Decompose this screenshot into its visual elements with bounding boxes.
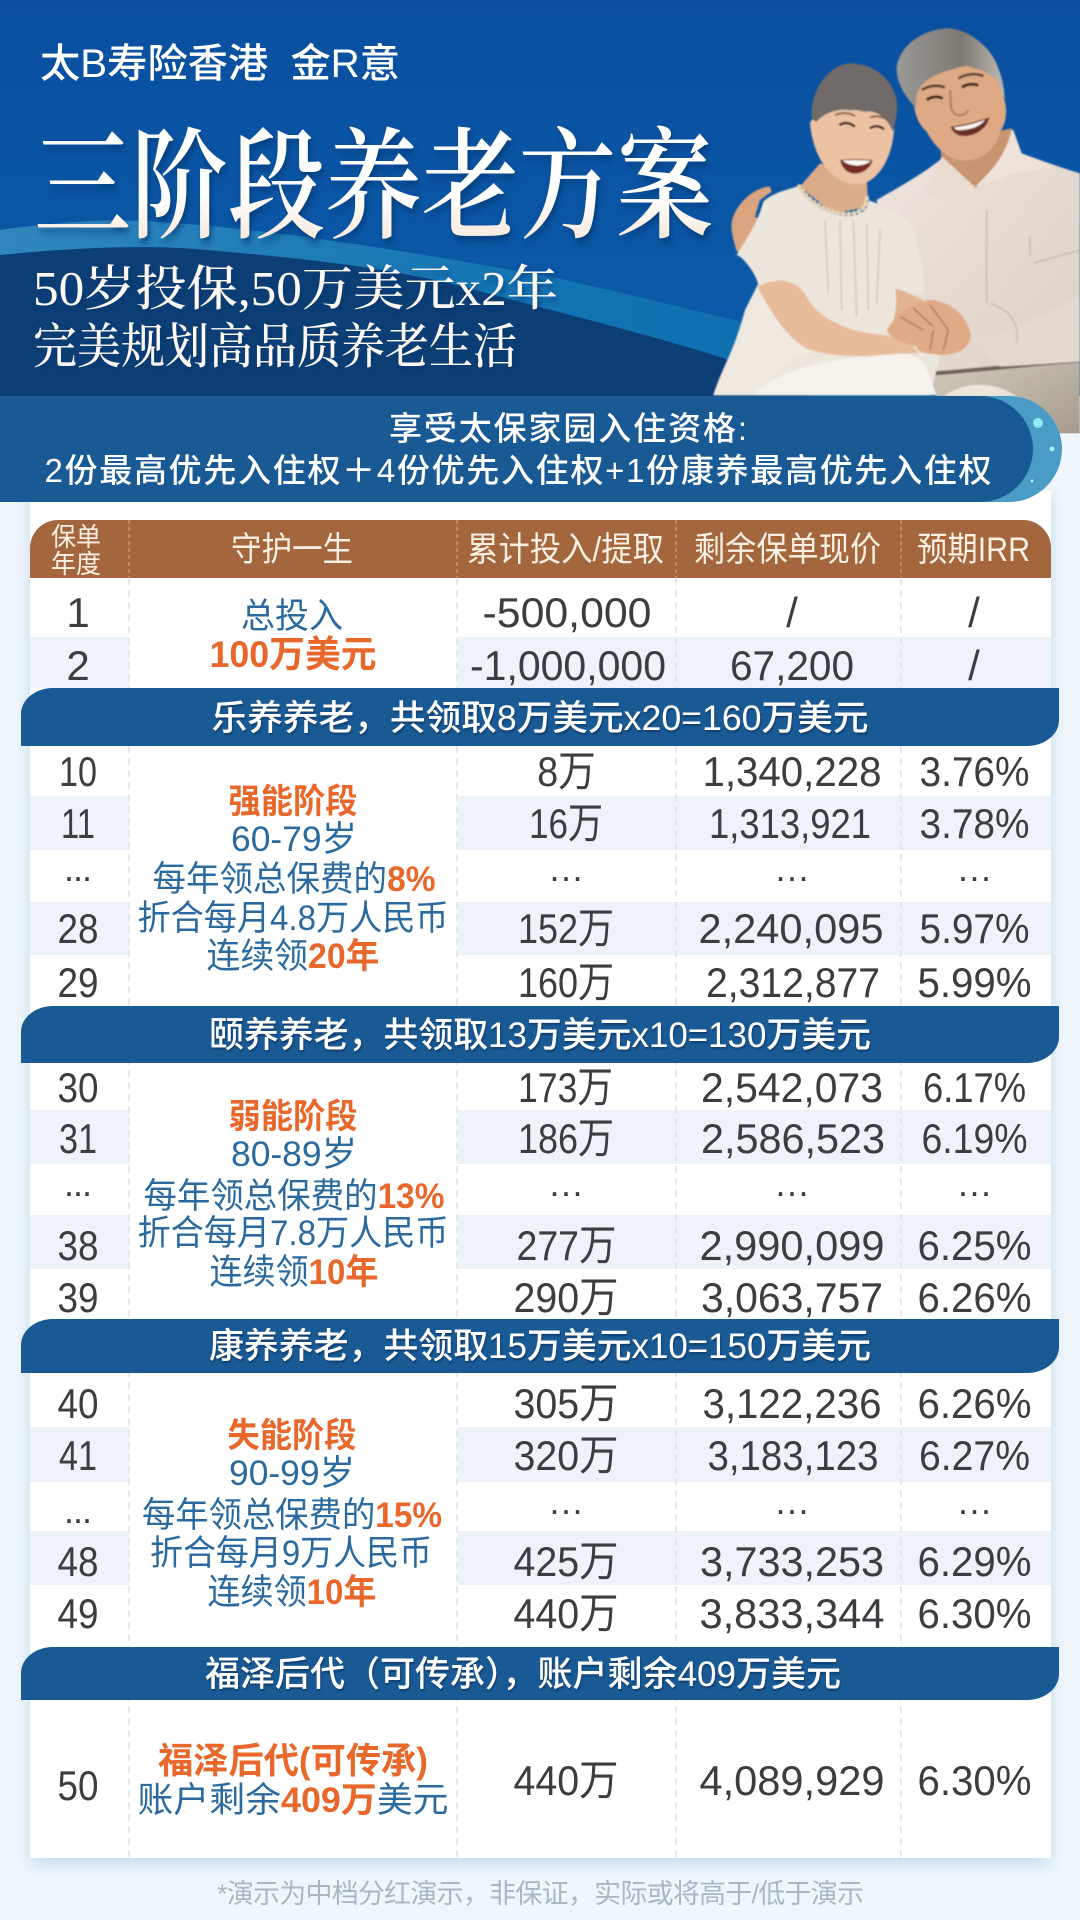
table stripes bbox=[30, 637, 1051, 1585]
strong ability description: 连续领20年 bbox=[206, 937, 380, 976]
section: strong ability rows: 3.78% bbox=[920, 800, 1030, 847]
section: weak ability rows: 38 bbox=[58, 1222, 98, 1269]
section: total investment rows: 2 bbox=[66, 642, 90, 689]
weak ability description: 每年领总保费的13% bbox=[144, 1177, 444, 1216]
band: yi yang bbox=[21, 1006, 1059, 1063]
section: strong ability rows: 11 bbox=[61, 800, 95, 847]
strong ability description: 每年领总保费的8% bbox=[152, 860, 435, 899]
section: weak ability rows: 277万 bbox=[516, 1222, 616, 1269]
man trousers bbox=[932, 362, 1080, 434]
section: weak ability rows: 3,063,757 bbox=[701, 1274, 883, 1321]
weak ability description: 弱能阶段 bbox=[228, 1098, 358, 1136]
white table card bbox=[30, 490, 1051, 1858]
total investment cell bbox=[210, 597, 376, 675]
section: total investment rows: -1,000,000 bbox=[470, 642, 666, 689]
woman arm bbox=[757, 281, 918, 356]
section: disability rows: 6.27% bbox=[919, 1432, 1030, 1479]
section: year 50 row: 440万 bbox=[514, 1757, 618, 1804]
woman eyes and brows bbox=[839, 123, 884, 129]
section: weak ability rows: 2,990,099 bbox=[700, 1222, 884, 1269]
brand line: 太B寿险香港 金R意 bbox=[40, 42, 400, 86]
section: disability rows: 40 bbox=[58, 1380, 98, 1427]
section: strong ability rows: ... bbox=[958, 848, 991, 889]
section: total investment rows: 67,200 bbox=[730, 642, 854, 689]
section: disability rows: 48 bbox=[58, 1538, 98, 1585]
section: disability rows: 3,733,253 bbox=[700, 1538, 884, 1585]
woman lower blouse bbox=[712, 348, 734, 396]
clasped hands bbox=[887, 300, 971, 355]
section: strong ability rows: 152万 bbox=[518, 905, 614, 952]
section: strong ability rows: ... bbox=[550, 848, 582, 889]
section: strong ability rows: 1,313,921 bbox=[709, 800, 871, 847]
section: weak ability rows: ... bbox=[776, 1163, 808, 1204]
man hand on shoulder bbox=[731, 187, 772, 252]
section: disability rows: 425万 bbox=[514, 1538, 618, 1585]
section: weak ability rows: 6.26% bbox=[918, 1274, 1032, 1321]
woman hair bbox=[812, 63, 897, 132]
section: disability rows: 305万 bbox=[514, 1380, 618, 1427]
section: weak ability rows: 290万 bbox=[514, 1274, 618, 1321]
disability description: 失能阶段 bbox=[228, 1417, 356, 1455]
section: weak ability rows: 6.25% bbox=[918, 1222, 1032, 1269]
disability description: 每年领总保费的15% bbox=[142, 1496, 442, 1535]
subtitle line 1: 50岁投保,50万美元x2年 bbox=[33, 262, 558, 317]
disability description: 连续领10年 bbox=[208, 1573, 376, 1612]
section: disability rows: 41 bbox=[59, 1432, 97, 1479]
section: year 50 row: 50 bbox=[58, 1762, 98, 1809]
section: weak ability rows: 186万 bbox=[518, 1115, 614, 1162]
section: weak ability rows: 2,542,073 bbox=[701, 1064, 883, 1111]
section: strong ability rows: 16万 bbox=[529, 800, 603, 847]
section: total investment rows bbox=[66, 589, 980, 689]
band: le yang: 乐养养老，共领取8万美元x20=160万美元 bbox=[212, 699, 868, 738]
ribbon dots bbox=[1030, 418, 1054, 482]
section: disability rows: 6.26% bbox=[918, 1380, 1032, 1427]
section: strong ability rows: 1,340,228 bbox=[702, 748, 882, 795]
section: strong ability rows: 160万 bbox=[518, 959, 614, 1006]
strong ability description: 60-79岁 bbox=[231, 820, 357, 859]
woman blouse bbox=[736, 186, 924, 294]
section: disability rows: 3,122,236 bbox=[702, 1380, 882, 1427]
section: total investment rows: 1 bbox=[66, 589, 90, 636]
disability description: 折合每月9万人民币 bbox=[150, 1534, 432, 1573]
section: weak ability rows: ... bbox=[958, 1163, 991, 1204]
section: strong ability rows: ... bbox=[64, 848, 92, 889]
woman face bbox=[810, 110, 894, 184]
man hair bbox=[897, 28, 1005, 108]
weak ability description: 80-89岁 bbox=[231, 1135, 357, 1174]
section: weak ability rows: 39 bbox=[58, 1274, 98, 1321]
man neck bbox=[940, 128, 1017, 188]
section: disability rows: ... bbox=[776, 1481, 808, 1522]
section: strong ability rows: 2,312,877 bbox=[706, 959, 880, 1006]
section: disability rows: 3,183,123 bbox=[708, 1432, 878, 1479]
section: year 50 row: 4,089,929 bbox=[700, 1757, 884, 1804]
section: total investment rows: / bbox=[968, 589, 980, 636]
section: disability rows bbox=[58, 1380, 1032, 1637]
ribbon: residence qualification bbox=[0, 396, 1062, 502]
section: weak ability rows: ... bbox=[550, 1163, 582, 1204]
photo: smiling senior couple bbox=[713, 28, 1080, 440]
man shirt bbox=[877, 130, 1080, 375]
section: strong ability rows: 29 bbox=[58, 959, 98, 1006]
band: kang yang: 康养养老，共领取15万美元x10=150万美元 bbox=[209, 1327, 871, 1366]
section: weak ability rows: 173万 bbox=[518, 1064, 613, 1111]
section: strong ability rows bbox=[58, 748, 1032, 1006]
header: policy year: 保单 bbox=[51, 522, 101, 552]
ribbon line 2: 2份最高优先入住权＋4份优先入住权+1份康养最高优先入住权 bbox=[44, 452, 992, 489]
section: disability rows: ... bbox=[64, 1490, 92, 1531]
weak ability description bbox=[138, 1098, 448, 1292]
section: weak ability rows: 6.17% bbox=[923, 1064, 1026, 1111]
section: disability rows: 6.29% bbox=[918, 1538, 1032, 1585]
section: disability rows: 440万 bbox=[514, 1590, 618, 1637]
pearl necklace bbox=[799, 187, 867, 214]
total investment cell: 100万美元 bbox=[210, 634, 376, 675]
section: total investment rows: / bbox=[968, 642, 980, 689]
weak ability description: 折合每月7.8万人民币 bbox=[138, 1214, 448, 1253]
section: weak ability rows: ... bbox=[64, 1163, 92, 1204]
band: legacy bbox=[21, 1647, 1059, 1700]
footnote: *演示为中档分红演示，非保证，实际或将高于/低于演示 bbox=[217, 1879, 864, 1909]
section: weak ability rows: 6.19% bbox=[922, 1115, 1028, 1162]
column dividers bbox=[129, 578, 901, 1858]
section: disability rows: 49 bbox=[58, 1590, 98, 1637]
man mouth bbox=[951, 117, 989, 136]
header: remaining cash value: 剩余保单现价 bbox=[694, 531, 881, 569]
man collar bbox=[939, 156, 976, 188]
section: strong ability rows: 5.99% bbox=[918, 959, 1032, 1006]
woman neck bbox=[800, 163, 868, 214]
section: disability rows: 3,833,344 bbox=[700, 1590, 884, 1637]
man sleeve folds bbox=[998, 350, 1080, 368]
strong ability description: 折合每月4.8万人民币 bbox=[138, 899, 448, 938]
total investment cell: 总投入 bbox=[241, 597, 343, 636]
section: weak ability rows: 30 bbox=[58, 1064, 98, 1111]
strong ability description bbox=[138, 783, 448, 976]
band: yi yang: 颐养养老，共领取13万美元x10=130万美元 bbox=[209, 1016, 871, 1055]
section: year 50 row bbox=[58, 1740, 1032, 1820]
legacy description bbox=[138, 1740, 448, 1820]
man eyes and brows bbox=[922, 74, 983, 90]
section: total investment rows: / bbox=[786, 589, 798, 636]
section: disability rows: ... bbox=[958, 1481, 991, 1522]
main title: 三阶段养老方案 bbox=[34, 122, 713, 254]
ribbon line 1: 享受太保家园入住资格: bbox=[389, 410, 747, 447]
woman skirt bbox=[753, 354, 937, 395]
section: year 50 row: 6.30% bbox=[918, 1757, 1032, 1804]
header: expected IRR: 预期IRR bbox=[917, 531, 1030, 569]
legacy description: 福泽后代(可传承) bbox=[158, 1740, 428, 1781]
section: weak ability rows: 2,586,523 bbox=[701, 1115, 885, 1162]
strong ability description: 强能阶段 bbox=[228, 783, 358, 821]
section: strong ability rows: 3.76% bbox=[920, 748, 1030, 795]
section: strong ability rows: 5.97% bbox=[920, 905, 1030, 952]
disability description bbox=[142, 1417, 442, 1612]
section: strong ability rows: 10 bbox=[59, 748, 97, 795]
subtitle line 2: 完美规划高品质养老生活 bbox=[33, 321, 517, 375]
table header bbox=[30, 520, 1051, 579]
hero banner background bbox=[0, 0, 1080, 396]
disability description: 90-99岁 bbox=[229, 1454, 355, 1493]
man face bbox=[914, 63, 1006, 161]
section: weak ability rows: 31 bbox=[59, 1115, 97, 1162]
section: weak ability rows bbox=[58, 1064, 1032, 1321]
header: policy year bbox=[51, 522, 101, 579]
band: kang yang bbox=[21, 1319, 1059, 1373]
section: strong ability rows: 2,240,095 bbox=[698, 905, 884, 952]
header: cumulative: 累计投入/提取 bbox=[467, 531, 664, 569]
section: disability rows: 6.30% bbox=[918, 1590, 1032, 1637]
header: policy year: 年度 bbox=[51, 549, 101, 579]
woman body base bbox=[713, 283, 940, 395]
section: strong ability rows: ... bbox=[776, 848, 808, 889]
header: lifelong protection: 守护一生 bbox=[231, 531, 353, 569]
band: le yang bbox=[21, 688, 1059, 746]
section: total investment rows: -500,000 bbox=[482, 589, 652, 636]
section: disability rows: 320万 bbox=[514, 1432, 618, 1479]
weak ability description: 连续领10年 bbox=[210, 1253, 378, 1292]
section: strong ability rows: 8万 bbox=[537, 748, 596, 795]
woman mouth bbox=[840, 159, 873, 174]
legacy description: 账户剩余409万美元 bbox=[138, 1781, 448, 1820]
section: disability rows: ... bbox=[550, 1481, 582, 1522]
band: legacy: 福泽后代（可传承），账户剩余409万美元 bbox=[205, 1655, 841, 1694]
section: strong ability rows: 28 bbox=[58, 905, 98, 952]
